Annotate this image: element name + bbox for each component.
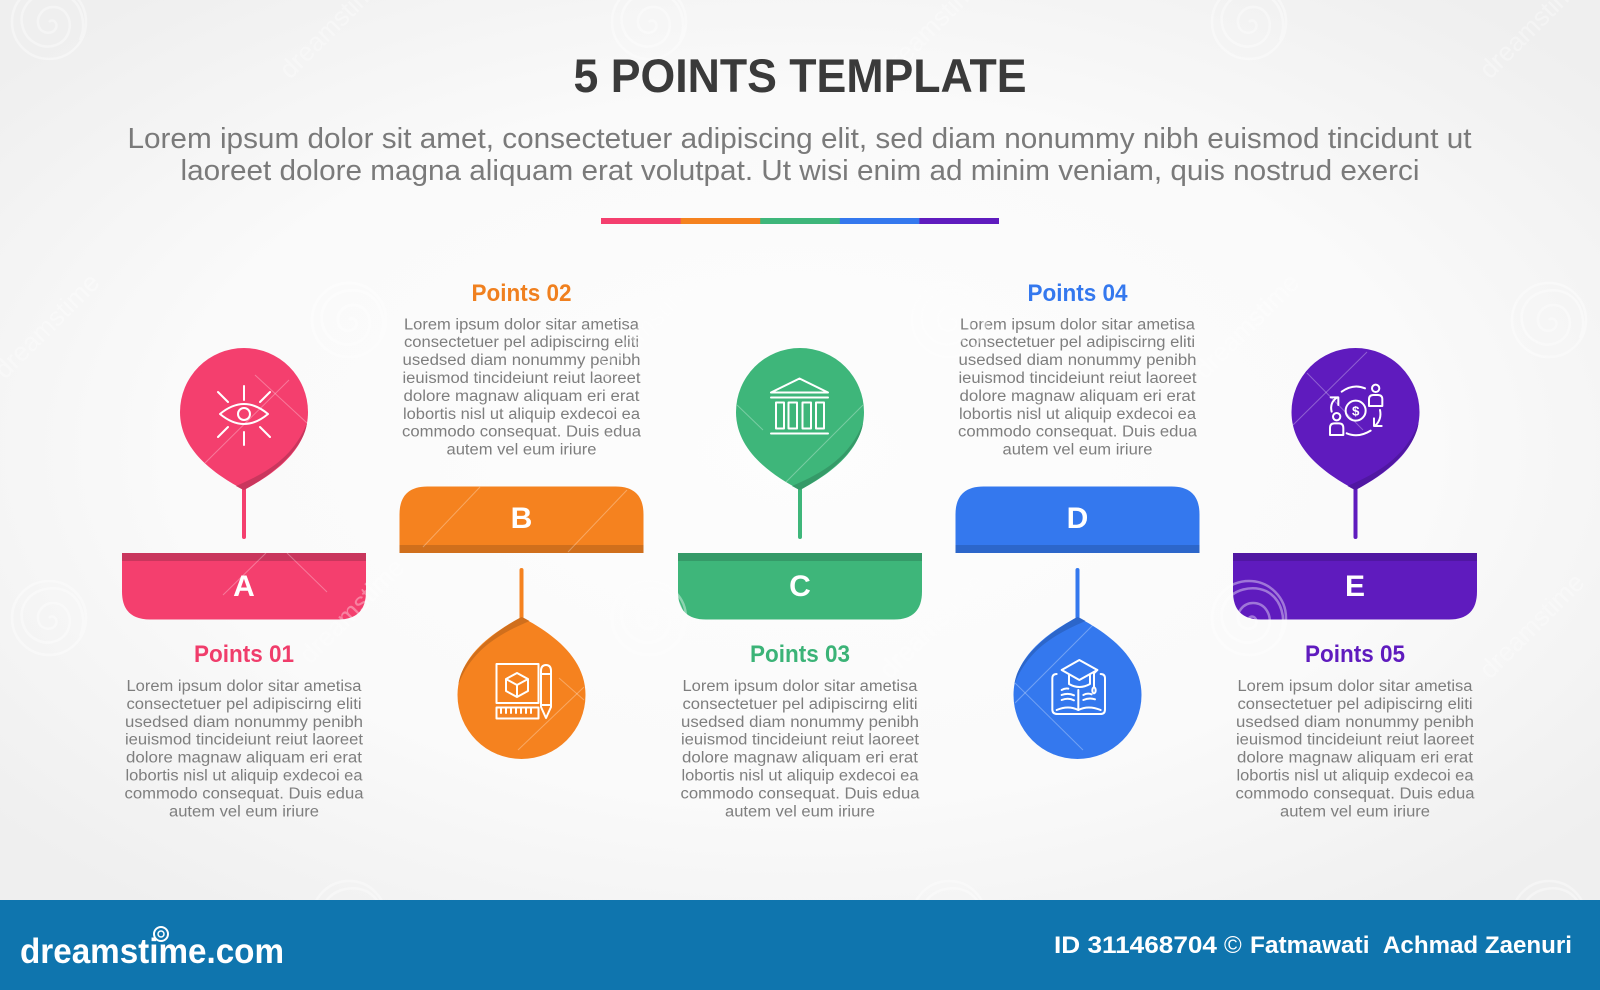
- text block D: autem vel eum iriure: [1002, 442, 1152, 459]
- panel: point D: [956, 280, 1200, 759]
- bar C: [678, 553, 922, 620]
- text block D: lobortis nisl ut aliquip exdecoi ea: [959, 406, 1196, 423]
- text block D: [958, 316, 1197, 459]
- heading: points 05: Points 05: [1305, 641, 1405, 668]
- text: dreamstime: [1473, 567, 1590, 684]
- text block B: consectetuer pel adipiscirng eliti: [404, 334, 639, 351]
- panel: point B: [400, 280, 644, 759]
- bar B: B: [511, 502, 532, 535]
- heading: points 03: Points 03: [750, 641, 850, 668]
- text block E: Lorem ipsum dolor sitar ametisa: [1238, 678, 1473, 695]
- text: dreamstime: [1188, 267, 1305, 384]
- text block A: consectetuer pel adipiscirng eliti: [126, 696, 362, 713]
- bar A: A: [233, 570, 255, 603]
- text block C: Lorem ipsum dolor sitar ametisa: [682, 678, 918, 695]
- text: dreamstime: [293, 552, 410, 669]
- title: 5 POINTS TEMPLATE: [574, 49, 1026, 102]
- text block A: Lorem ipsum dolor sitar ametisa: [126, 678, 362, 695]
- footer credit: ID 311468704: [1054, 932, 1218, 959]
- text block A: dolore magnaw aliquam eri erat: [126, 750, 363, 767]
- footer credit: ©: [1224, 932, 1242, 959]
- pin A: [180, 348, 308, 539]
- text block D: Lorem ipsum dolor sitar ametisa: [960, 316, 1195, 333]
- text block B: Lorem ipsum dolor sitar ametisa: [404, 316, 639, 333]
- text block D: ieuismod tincideiunt reiut laoreet: [958, 370, 1197, 387]
- bar C: C: [789, 570, 811, 603]
- footer credit: Achmad Zaenuri: [1383, 932, 1572, 959]
- text block A: lobortis nisl ut aliquip exdecoi ea: [126, 768, 363, 784]
- text block E: lobortis nisl ut aliquip exdecoi ea: [1236, 768, 1474, 784]
- footer credit: [1054, 932, 1572, 959]
- text block B: autem vel eum iriure: [446, 442, 596, 459]
- bar B: [400, 486, 644, 553]
- text block B: lobortis nisl ut aliquip exdecoi ea: [403, 406, 640, 423]
- text block D: commodo consequat. Duis edua: [958, 424, 1197, 441]
- bar E: E: [1345, 570, 1365, 603]
- text block E: usedsed diam nonummy penibh: [1236, 714, 1474, 731]
- text block A: autem vel eum iriure: [169, 803, 319, 820]
- pin B: [458, 568, 586, 759]
- text block C: dolore magnaw aliquam eri erat: [682, 750, 919, 767]
- text block A: [124, 678, 364, 820]
- text block C: consectetuer pel adipiscirng eliti: [682, 696, 918, 713]
- bar A: [122, 553, 366, 620]
- text block D: usedsed diam nonummy penibh: [958, 352, 1196, 369]
- text block B: [402, 316, 641, 459]
- text block B: ieuismod tincideiunt reiut laoreet: [402, 370, 641, 387]
- text: dreamstime: [588, 267, 705, 384]
- text block D: dolore magnaw aliquam eri erat: [960, 388, 1196, 405]
- text block C: ieuismod tincideiunt reiut laoreet: [681, 732, 920, 749]
- text block E: consectetuer pel adipiscirng eliti: [1238, 696, 1472, 713]
- icon: money exchange between people: [1330, 385, 1382, 435]
- text block E: [1236, 678, 1475, 820]
- colour rule: [601, 218, 999, 224]
- subtitle: Lorem ipsum dolor sit amet, consectetuer adipiscing elit, sed diam nonummy nibh euismod tincidunt ut: [128, 123, 1472, 155]
- text block D: consectetuer pel adipiscirng eliti: [960, 334, 1195, 351]
- bar E: [1233, 553, 1477, 620]
- text block E: ieuismod tincideiunt reiut laoreet: [1236, 732, 1475, 749]
- text block C: commodo consequat. Duis edua: [680, 785, 920, 802]
- heading: points 02: Points 02: [472, 280, 572, 307]
- pin E: [1292, 348, 1420, 539]
- heading: points 01: Points 01: [194, 641, 294, 668]
- icon: money exchange between people: $: [1352, 403, 1360, 418]
- text block E: commodo consequat. Duis edua: [1236, 785, 1475, 802]
- panel: point A: [122, 348, 366, 820]
- footer credit: Fatmawati: [1250, 932, 1370, 959]
- icon: eye: [218, 386, 270, 445]
- pin D: [1014, 568, 1142, 759]
- text block A: commodo consequat. Duis edua: [124, 785, 364, 802]
- text block B: commodo consequat. Duis edua: [402, 424, 641, 441]
- pin C: [736, 348, 864, 539]
- subtitle: [128, 123, 1472, 187]
- text block A: usedsed diam nonummy penibh: [125, 714, 363, 731]
- text block B: dolore magnaw aliquam eri erat: [404, 388, 640, 405]
- text block B: usedsed diam nonummy penibh: [402, 352, 640, 369]
- text block A: ieuismod tincideiunt reiut laoreet: [125, 732, 364, 749]
- text block C: [680, 678, 920, 820]
- text: dreamstime: [873, 567, 990, 684]
- icon: bank building: [771, 378, 828, 434]
- text block E: dolore magnaw aliquam eri erat: [1237, 750, 1474, 767]
- text block C: usedsed diam nonummy penibh: [681, 714, 919, 731]
- footer bar: [0, 900, 1600, 990]
- footer logo: dreamstime.com: [20, 932, 284, 971]
- subtitle: laoreet dolore magna aliquam erat volutpat. Ut wisi enim ad minim veniam, quis nostrud exerci: [180, 155, 1420, 187]
- text block E: autem vel eum iriure: [1280, 803, 1430, 820]
- bar D: [956, 486, 1200, 553]
- icon: book and graduation cap: [1052, 660, 1105, 714]
- text block C: lobortis nisl ut aliquip exdecoi ea: [682, 768, 919, 784]
- panel: point C: [678, 348, 922, 820]
- heading: points 04: Points 04: [1028, 280, 1128, 307]
- bar D: D: [1067, 502, 1088, 535]
- text block C: autem vel eum iriure: [725, 803, 875, 820]
- panel: point E: [1233, 348, 1477, 820]
- icon: blueprint cube and pencil: [496, 664, 551, 718]
